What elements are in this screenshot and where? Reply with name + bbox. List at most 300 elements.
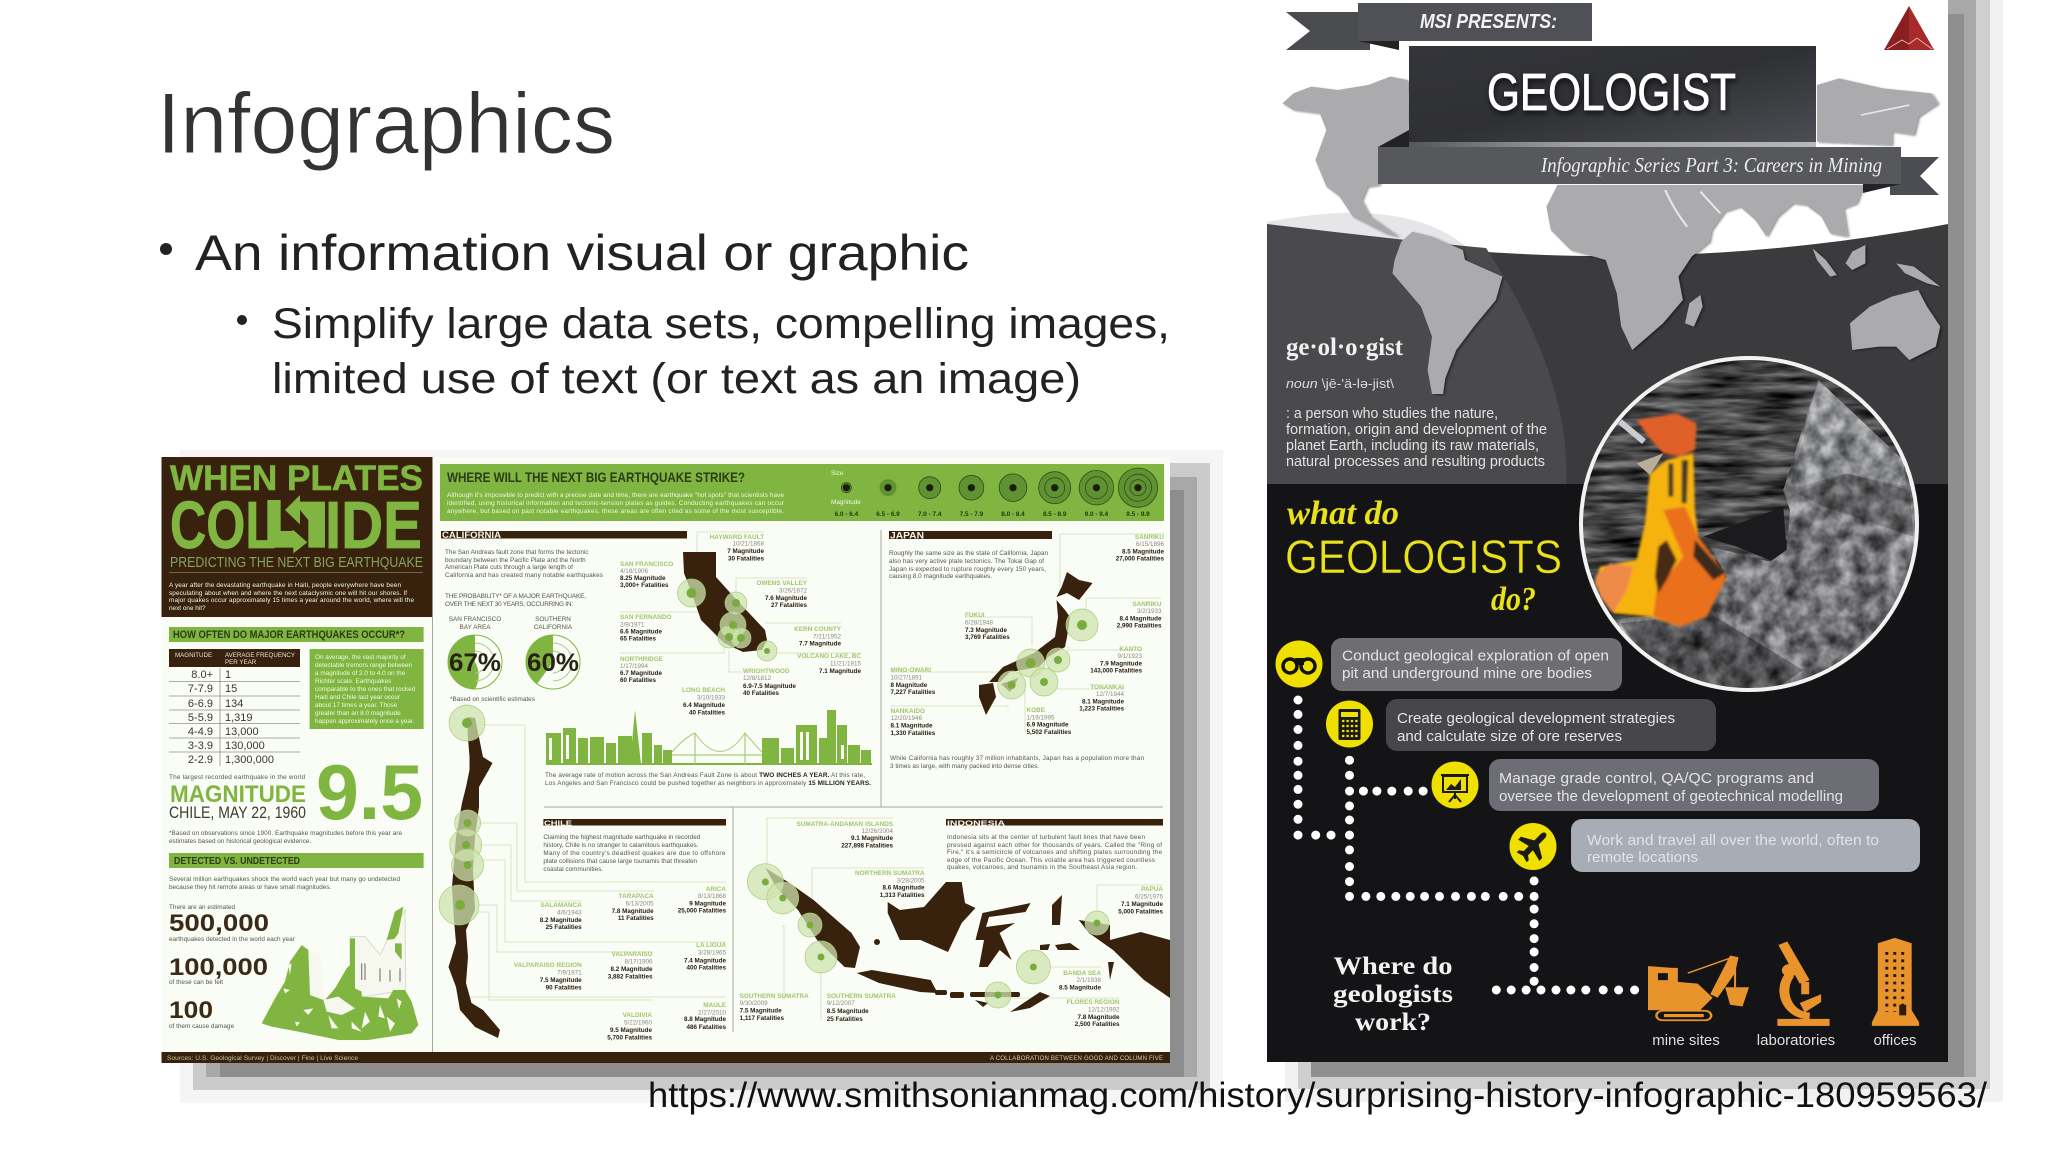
icon: binoculars <box>1276 640 1322 688</box>
japan earthquake labels: FUKUI <box>965 612 985 619</box>
frequency table: AVERAGE FREQUENCY <box>225 652 295 659</box>
chile earthquake labels: 6/13/2005 <box>626 900 654 907</box>
panel: detected vs undetected <box>169 853 424 1040</box>
frequency table: 1,300,000 <box>225 754 274 766</box>
indonesia earthquake labels: 12/26/2004 <box>861 828 893 835</box>
step 4: travel: remote locations <box>1587 849 1698 866</box>
panel: california: boundary between the Pacific Plate and the North <box>445 557 586 564</box>
frequency table: PER YEAR <box>225 659 257 666</box>
indonesia earthquake labels: 9/12/2007 <box>827 1000 855 1007</box>
chile earthquake labels: 5,700 Fatalities <box>607 1034 652 1041</box>
step 3: grade control: Manage grade control, QA/QC programs and <box>1499 770 1814 787</box>
chile earthquake labels: 2/27/2010 <box>698 1009 726 1016</box>
panel: dark curved backdrop <box>1267 213 1948 1062</box>
bullet list <box>160 225 1170 403</box>
california earthquake labels: 10/21/1868 <box>732 540 764 548</box>
chart: 60 percent probability pie: 60% <box>527 649 579 677</box>
panel: california: CALIFORNIA <box>534 624 573 631</box>
heading: where do geologists work: Where do <box>1334 953 1452 980</box>
chile earthquake labels: TARAPACA <box>619 893 654 900</box>
indonesia earthquake labels: 3/28/2005 <box>896 877 925 884</box>
california earthquake labels: 3/26/1872 <box>779 588 807 594</box>
panel: japan: causing 8.0 magnitude earthquakes. <box>889 573 992 580</box>
title box: geologist <box>1409 46 1816 142</box>
icon: microscope <box>1777 941 1830 1026</box>
japan earthquake labels: 27,000 Fatalities <box>1116 556 1164 563</box>
panel: where will the next big earthquake strike: WHERE WILL THE NEXT BIG EARTHQUAKE STRIKE? <box>447 469 745 485</box>
callout: average tremors: detectable tremors range between <box>315 662 412 669</box>
poster: geologist: mine sites <box>1652 1032 1720 1049</box>
chile earthquake labels: 7/9/1971 <box>557 969 582 976</box>
legend: magnitude circles: 7.5 - 7.9 <box>960 511 984 518</box>
chile earthquake labels: 5/22/1960 <box>624 1019 652 1026</box>
japan earthquake labels: SANRIKU <box>1132 601 1162 608</box>
japan earthquake labels: 1/16/1995 <box>1026 714 1055 722</box>
ribbon: msi presents: MSI PRESENTS: <box>1420 11 1557 33</box>
ribbon: infographic series part 3: Infographic Series Part 3: Careers in Mining <box>1540 153 1882 177</box>
panel: california <box>441 530 872 787</box>
japan earthquake labels: 3,769 Fatalities <box>965 634 1010 641</box>
panel: indonesia: edge of the Pacific Ocean. This volatile area has triggered countless <box>947 857 1155 864</box>
japan earthquake labels: KANTO <box>1119 646 1142 653</box>
california earthquake labels: SAN FRANCISCO <box>620 561 673 568</box>
frequency table: 13,000 <box>225 726 259 738</box>
california earthquake labels: 4/18/1906 <box>620 568 649 575</box>
indonesia earthquake labels: NORTHERN SUMATRA <box>855 870 925 877</box>
frequency table: 2-2.9 <box>188 754 213 766</box>
panel: california: *Based on scientific estimates <box>450 696 535 703</box>
japan earthquake labels: 7.3 Magnitude <box>965 627 1007 634</box>
california earthquake labels: OWENS VALLEY <box>756 580 808 587</box>
callout: average tremors: Richter scale. Earthquakes <box>315 678 391 685</box>
indonesia earthquake labels: SUMATRA-ANDAMAN ISLANDS <box>797 821 894 828</box>
heading: where do geologists work: work? <box>1355 1009 1431 1036</box>
panel: magnitude record: *Based on observations since 1900. Earthquake magnitudes before this year are <box>169 830 402 837</box>
frequency table: 4-4.9 <box>188 726 213 738</box>
indonesia earthquake labels: 2/1/1938 <box>1076 977 1101 984</box>
frequency table: 5-5.9 <box>188 712 213 724</box>
california earthquake labels: 7/21/1952 <box>813 633 841 640</box>
panel: japan: also has very active plate tectonics. The Tokai Gap of <box>889 558 1044 565</box>
panel: magnitude record: The largest recorded earthquake in the world <box>169 774 305 781</box>
indonesia earthquake labels: 7.5 Magnitude <box>740 1008 782 1015</box>
chile earthquake labels: 7.8 Magnitude <box>612 908 654 915</box>
map: california <box>620 532 861 672</box>
chile earthquake labels: 8.2 Magnitude <box>611 966 653 973</box>
indonesia earthquake labels: 8.6 Magnitude <box>883 884 925 891</box>
california earthquake labels: 8.25 Magnitude <box>620 575 666 582</box>
panel: chile: Many of the country's deadliest quakes are due to offshore <box>543 850 726 857</box>
japan earthquake labels: 1,223 Fatalities <box>1079 706 1124 713</box>
panel: how often do major earthquakes occur <box>169 627 424 766</box>
panel: magnitude record: MAGNITUDE <box>170 781 306 808</box>
chile earthquake labels: 9 Magnitude <box>689 900 726 907</box>
frequency table: 1,319 <box>225 712 253 724</box>
panel: chile <box>439 705 727 1041</box>
panel: poster header: WHEN PLATES <box>170 459 423 498</box>
japan earthquake labels: 143,000 Fatalities <box>1090 668 1142 675</box>
chart: 67 percent probability pie <box>448 635 502 689</box>
japan earthquake labels: 8.1 Magnitude <box>890 722 933 729</box>
step 3: grade control <box>1432 759 1879 811</box>
japan earthquake labels: 6/28/1948 <box>965 620 994 626</box>
california earthquake labels: 40 Fatalities <box>689 710 725 716</box>
panel: california: American Plate cuts through a large length of <box>445 564 573 571</box>
icon: presentation board <box>1432 762 1478 808</box>
california earthquake labels: KERN COUNTY <box>794 626 842 633</box>
japan earthquake labels: 5,502 Fatalities <box>1026 729 1072 736</box>
panel: detected vs undetected: Several million earthquakes shock the world each year but many go undetected <box>169 876 400 883</box>
panel: indonesia: INDONESIA <box>947 818 1006 828</box>
panel: how often do major earthquakes occur: HOW OFTEN DO MAJOR EARTHQUAKES OCCUR*? <box>173 629 405 641</box>
california earthquake labels <box>620 534 861 716</box>
source url: https://www.smithsonianmag.com/history/surprising-history-infographic-180959563/ <box>648 1076 1987 1115</box>
panel: california: SAN FRANCISCO <box>449 616 501 623</box>
heading: what do geologists do: what do <box>1287 495 1399 532</box>
icon: red mountain logo <box>1884 6 1934 50</box>
california earthquake labels: 2/9/1971 <box>620 621 645 628</box>
panel: detected vs undetected: 100,000 <box>169 954 268 981</box>
legend: magnitude circles: 7.0 - 7.4 <box>918 511 942 518</box>
japan earthquake labels: SANRIKU <box>1135 534 1164 541</box>
callout: average tremors: greater than an 8.0 magnitude <box>315 710 401 717</box>
chile earthquake labels: 7.5 Magnitude <box>540 977 582 984</box>
chile earthquake labels: 8.8 Magnitude <box>684 1016 726 1023</box>
step 4: travel <box>1510 819 1920 872</box>
callout: average tremors: happen approximately once a year. <box>315 718 415 725</box>
california earthquake labels: 60 Fatalities <box>620 677 657 684</box>
japan earthquake labels: MINO-OWARI <box>890 667 931 674</box>
chile earthquake labels: 4/6/1943 <box>557 910 582 916</box>
japan earthquake labels: 8.5 Magnitude <box>1122 548 1164 555</box>
panel: magnitude record: 9.5 <box>316 748 423 836</box>
frequency table: 15 <box>225 683 237 695</box>
footer strip: sources and credits: Sources: U.S. Geological Survey | Discover | Fine | Live Science <box>167 1055 358 1062</box>
japan earthquake labels: 2,990 Fatalities <box>1117 623 1162 630</box>
panel: japan <box>889 530 1164 770</box>
map: chile <box>439 705 726 1038</box>
california earthquake labels: 65 Fatalities <box>620 635 657 642</box>
california earthquake labels: 7.6 Magnitude <box>765 595 807 602</box>
definition text: ge·ol·o·gist <box>1286 334 1404 361</box>
illustration: city skyline and bridge <box>546 710 872 765</box>
panel: detected vs undetected: There are an estimated <box>169 904 236 911</box>
panel: where will the next big earthquake strike: identified, using historical information and tectonic-tension plates as guides. Conducting earthquakes can occur <box>447 500 785 507</box>
icon: excavator <box>1648 956 1749 1020</box>
california earthquake labels: 27 Fatalities <box>771 602 807 609</box>
california earthquake labels: 6.7 Magnitude <box>620 670 662 677</box>
poster: when plates collide <box>162 457 1170 1063</box>
indonesia earthquake labels: 8.5 Magnitude <box>1059 984 1101 991</box>
chile earthquake labels: 486 Fatalities <box>686 1024 726 1031</box>
panel: where will the next big earthquake strike: anywhere, but based on past notable earthquakes, these areas are often cited as some of the most susceptible. <box>447 508 784 515</box>
slide title: Infographics <box>157 76 615 172</box>
icon: calculator <box>1326 700 1373 748</box>
indonesia earthquake labels: SOUTHERN SUMATRA <box>740 993 809 1000</box>
indonesia earthquake labels: 6/25/1976 <box>1135 894 1163 900</box>
chile earthquake labels: 400 Fatalities <box>686 965 726 972</box>
california earthquake labels: 40 Fatalities <box>743 690 780 697</box>
chart: 60 percent probability pie <box>526 635 580 689</box>
indonesia earthquake labels: 2,500 Fatalities <box>1075 1021 1120 1028</box>
chile earthquake labels: 11 Fatalities <box>618 915 654 922</box>
panel: japan: Japan is expected to rupture roughly every 150 years, <box>889 566 1046 573</box>
panel: where will the next big earthquake strike: Although it's impossible to predict with a precise date and time, there are earthquake "hot spots" that scientists have <box>447 492 784 499</box>
panel: california: California and has created many notable earthquakes <box>445 572 603 579</box>
panel: california: THE PROBABILITY* OF A MAJOR EARTHQUAKE, <box>445 593 586 600</box>
legend: magnitude circles: 8.0 - 8.4 <box>1001 511 1025 518</box>
chile earthquake labels: 25,000 Fatalities <box>678 908 726 915</box>
chile earthquake labels: MAULE <box>703 1002 727 1009</box>
step 2: development: and calculate size of ore reserves <box>1397 728 1622 745</box>
definition text: planet Earth, including its raw materials, <box>1286 438 1539 454</box>
japan earthquake labels: 8.1 Magnitude <box>1082 698 1124 705</box>
panel: magnitude record: CHILE, MAY 22, 1960 <box>169 803 306 822</box>
chile earthquake labels <box>514 886 727 1041</box>
panel: california: The average rate of motion across the San Andreas Fault Zone is about TWO INCHES A YEAR. At this rate, <box>545 772 865 779</box>
ribbon: msi presents <box>1286 3 1592 50</box>
heading: what do geologists do <box>1285 495 1562 618</box>
step 4: travel: Work and travel all over the world, often to <box>1587 832 1879 849</box>
panel: chile: Claiming the highest magnitude earthquake in recorded <box>543 834 701 841</box>
frequency table <box>169 649 300 766</box>
panel: japan: 3 times as large, with many packed into dense cities. <box>890 763 1039 770</box>
california earthquake labels: 3/10/1933 <box>697 694 725 702</box>
california earthquake labels: HAYWARD FAULT <box>710 534 764 541</box>
japan earthquake labels: 12/20/1946 <box>890 715 923 722</box>
bullet list: An information visual or graphic <box>195 225 969 281</box>
callout: average tremors: about 17 times a year. Those <box>315 702 398 709</box>
california earthquake labels: 12/8/1812 <box>743 675 772 682</box>
panel: california: OVER THE NEXT 30 YEARS, OCCURRING IN: <box>445 601 573 608</box>
japan earthquake labels: NANKAIDO <box>890 708 925 715</box>
legend: magnitude circles: 6.0 - 6.4 <box>835 511 859 518</box>
indonesia earthquake labels: 9/30/2009 <box>740 1000 768 1007</box>
legend: magnitude circles <box>831 468 1158 518</box>
panel: california: The San Andreas fault zone that forms the tectonic <box>445 549 589 556</box>
california earthquake labels: 6.9-7.5 Magnitude <box>743 683 796 690</box>
california earthquake labels: 3,000+ Fatalities <box>620 582 669 589</box>
chile earthquake labels: 8.2 Magnitude <box>540 917 582 924</box>
icon: collision arrows <box>267 495 325 553</box>
japan earthquake labels: KOBE <box>1026 707 1046 714</box>
japan earthquake labels: 3/2/1933 <box>1137 608 1162 615</box>
legend: magnitude circles: 8.5 - 8.9 <box>1043 511 1067 518</box>
heading: where do geologists work <box>1333 953 1453 1036</box>
callout: average tremors: On average, the vast majority of <box>315 654 406 661</box>
step 3: grade control: oversee the development of geotechnical modelling <box>1499 788 1843 805</box>
california earthquake labels: SAN FERNANDO <box>620 614 672 621</box>
panel: detected vs undetected: 100 <box>169 997 213 1024</box>
panel: indonesia: quakes, volcanoes, and tsunamis in the Southeast Asia region. <box>947 864 1137 871</box>
california earthquake labels: 1/17/1994 <box>620 663 649 670</box>
panel: indonesia: Fire," it's a semicircle of volcanoes and shifting plates surrounding the <box>947 849 1162 856</box>
california earthquake labels: VOLCANO LAKE, BC <box>797 653 861 660</box>
shadow: left poster <box>180 450 1223 1103</box>
panel: japan: JAPAN <box>890 530 924 540</box>
frequency table: 8.0+ <box>191 669 213 681</box>
chile earthquake labels: VALPARAISO <box>612 951 653 958</box>
ribbon: infographic series part 3 <box>1378 130 1939 195</box>
chile earthquake labels: 7.4 Magnitude <box>684 957 726 964</box>
panel: poster header: PREDICTING THE NEXT BIG EARTHQUAKE <box>170 554 423 571</box>
step 1: exploration: Conduct geological exploration of open <box>1342 648 1609 664</box>
panel: magnitude record: estimates based on historical geological evidence. <box>169 838 311 845</box>
icon: office building <box>1872 938 1919 1026</box>
chile earthquake labels: VALDIVIA <box>623 1012 652 1019</box>
frequency table: 134 <box>225 698 243 710</box>
panel: california: SOUTHERN <box>535 616 571 623</box>
japan earthquake labels: 8 Magnitude <box>890 682 928 689</box>
frequency table: 1 <box>225 669 231 681</box>
california earthquake labels: 7 Magnitude <box>727 548 764 555</box>
indonesia earthquake labels: 12/12/1992 <box>1088 1006 1120 1013</box>
panel: indonesia <box>740 818 1170 1028</box>
shadow: right poster <box>1285 0 2003 1102</box>
indonesia earthquake labels: 7.1 Magnitude <box>1121 901 1163 908</box>
indonesia earthquake labels: PAPUA <box>1141 886 1163 893</box>
indonesia earthquake labels: SOUTHERN SUMATRA <box>827 993 896 1000</box>
japan earthquake labels: 7,227 Fatalities <box>890 689 936 696</box>
step 1: exploration <box>1276 638 1622 691</box>
california earthquake labels: 6.6 Magnitude <box>620 628 662 635</box>
callout: average tremors: comparable to the ones that rocked <box>315 686 416 693</box>
frequency table: 7-7.9 <box>188 683 213 695</box>
indonesia earthquake labels: 1,117 Fatalities <box>740 1015 785 1022</box>
indonesia earthquake labels: 8.5 Magnitude <box>827 1008 869 1015</box>
japan earthquake labels: 6/15/1896 <box>1136 541 1164 548</box>
panel: poster header: major quakes occur approximately 15 times a year around the world, where will the <box>169 597 414 604</box>
chile earthquake labels: ARICA <box>706 886 726 893</box>
indonesia earthquake labels: 1,313 Fatalities <box>880 892 925 899</box>
heading: what do geologists do: GEOLOGISTS <box>1285 530 1562 583</box>
photo: lava flow in circle <box>1575 355 1925 695</box>
japan earthquake labels: 12/7/1944 <box>1096 691 1124 698</box>
panel: poster header: IDE <box>325 488 422 563</box>
indonesia earthquake labels: 7.8 Magnitude <box>1078 1014 1120 1021</box>
step 2: development: Create geological development strategies <box>1397 710 1675 727</box>
panel: poster header <box>162 457 432 617</box>
definition text: formation, origin and development of the <box>1286 422 1547 438</box>
indonesia earthquake labels: 227,898 Fatalities <box>841 842 893 849</box>
panel: chile: coastal communities. <box>543 866 603 873</box>
decorative dividers <box>432 530 1163 1052</box>
chile earthquake labels: 8/17/1906 <box>624 958 653 965</box>
callout: average tremors: a magnitude of 2.0 to 4.0 on the <box>315 670 406 677</box>
callout: average tremors: Haiti and Chile last year occur <box>315 694 401 701</box>
step 1: exploration: pit and underground mine ore bodies <box>1342 665 1592 682</box>
japan earthquake labels: 9/1/1923 <box>1117 653 1142 660</box>
legend: magnitude circles: Magnitude <box>831 499 861 506</box>
indonesia earthquake labels: 25 Fatalities <box>827 1016 863 1023</box>
heading: where do geologists work: geologists <box>1333 981 1453 1008</box>
panel: indonesia: Indonesia sits at the center of turbulent fault lines that have been <box>947 834 1145 841</box>
panel: poster header: A year after the devastating earthquake in Haiti, people everywhere have been <box>169 582 401 589</box>
panel: where will the next big earthquake strike <box>440 464 1164 521</box>
panel: chile: plate collisions that cause large tsunamis that threaten <box>543 858 698 865</box>
japan earthquake labels: 10/27/1891 <box>890 674 923 682</box>
map: world <box>1282 77 1940 394</box>
chile earthquake labels: 25 Fatalities <box>546 924 582 931</box>
california earthquake labels: 7.7 Magnitude <box>799 640 841 647</box>
icon: airplane <box>1510 823 1556 870</box>
panel: detected vs undetected: because they hit remote areas or have small magnitudes. <box>169 884 332 891</box>
definition text: natural processes and resulting products <box>1286 454 1545 470</box>
japan earthquake labels: TONANKAI <box>1090 684 1124 691</box>
panel: detected vs undetected: 500,000 <box>169 910 269 937</box>
poster: geologist: laboratories <box>1757 1032 1835 1049</box>
japan earthquake labels: 1,330 Fatalities <box>890 730 936 737</box>
japan earthquake labels: 8.4 Magnitude <box>1120 615 1162 622</box>
japan earthquake labels <box>890 534 1164 737</box>
frequency table: MAGNITUDE <box>175 652 212 659</box>
heading: what do geologists do: do? <box>1491 581 1536 618</box>
poster: geologist <box>1267 0 1948 1062</box>
callout: average tremors <box>310 649 424 729</box>
panel: detected vs undetected: of these can be felt <box>169 979 223 986</box>
frequency table: 130,000 <box>225 740 265 752</box>
panel: detected vs undetected: DETECTED VS. UNDETECTED <box>174 855 300 867</box>
chile earthquake labels: SALAMANCA <box>541 902 582 909</box>
panel: detected vs undetected: of them cause damage <box>169 1023 234 1030</box>
legend: magnitude circles: Size <box>831 470 844 477</box>
path: white dotted connectors <box>1298 700 1635 990</box>
indonesia earthquake labels <box>740 821 1163 1028</box>
footer strip: sources and credits: A COLLABORATION BETWEEN GOOD AND COLUMN FIVE <box>990 1056 1163 1062</box>
legend: magnitude circles: 9.0 - 9.4 <box>1085 511 1109 518</box>
california earthquake labels: 7.1 Magnitude <box>819 668 861 675</box>
frequency table: 3-3.9 <box>188 740 213 752</box>
japan earthquake labels: 7.9 Magnitude <box>1100 660 1142 667</box>
panel: california: BAY AREA <box>459 624 491 631</box>
indonesia earthquake labels: BANDA SEA <box>1063 970 1101 977</box>
panel: poster header: COL <box>170 488 276 563</box>
definition text: noun \jē-'ä-lə-jist\ <box>1286 376 1394 391</box>
chile earthquake labels: LA LIGUA <box>696 942 726 949</box>
california earthquake labels: NORTHRIDGE <box>620 656 664 663</box>
bullet list: Simplify large data sets, compelling images, <box>272 300 1170 348</box>
map: indonesia <box>747 818 1170 1020</box>
title box: geologist: GEOLOGIST <box>1487 64 1736 122</box>
panel: poster header: next one hit? <box>169 605 206 612</box>
chile earthquake labels: 9.5 Magnitude <box>610 1027 652 1034</box>
indonesia earthquake labels: 9.1 Magnitude <box>851 835 893 842</box>
japan earthquake labels: 6.9 Magnitude <box>1026 722 1069 728</box>
chile earthquake labels: 3/28/1965 <box>698 950 726 957</box>
map: japan <box>890 534 1164 733</box>
bullet list: limited use of text (or text as an image) <box>272 355 1081 403</box>
california earthquake labels: WRIGHTWOOD <box>743 668 790 675</box>
frequency table: 6-6.9 <box>188 698 213 710</box>
panel: magnitude record <box>169 748 423 845</box>
definition text: : a person who studies the nature, <box>1286 406 1498 422</box>
indonesia earthquake labels: 5,000 Fatalities <box>1118 908 1163 915</box>
chile earthquake labels: 8/13/1868 <box>698 893 726 900</box>
legend: magnitude circles: 6.5 - 6.9 <box>876 511 900 518</box>
poster: geologist: offices <box>1873 1032 1917 1049</box>
california earthquake labels: 6.4 Magnitude <box>683 702 725 709</box>
chile earthquake labels: 90 Fatalities <box>546 984 582 991</box>
panel: japan: Roughly the same size as the state of California, Japan <box>889 550 1048 557</box>
legend: magnitude circles: 9.5 - 9.9 <box>1126 511 1150 518</box>
california earthquake labels: 11/21/1915 <box>830 660 861 667</box>
panel: chile: CHILE <box>544 818 572 828</box>
indonesia earthquake labels: FLORES REGION <box>1067 999 1120 1006</box>
panel: detected vs undetected: earthquakes detected in the world each year <box>169 936 296 943</box>
chile earthquake labels: 3,882 Fatalities <box>608 973 653 980</box>
panel: chile: history, Chile is no stranger to calamitous earthquakes. <box>543 842 699 849</box>
panel: california: CALIFORNIA <box>442 530 502 540</box>
